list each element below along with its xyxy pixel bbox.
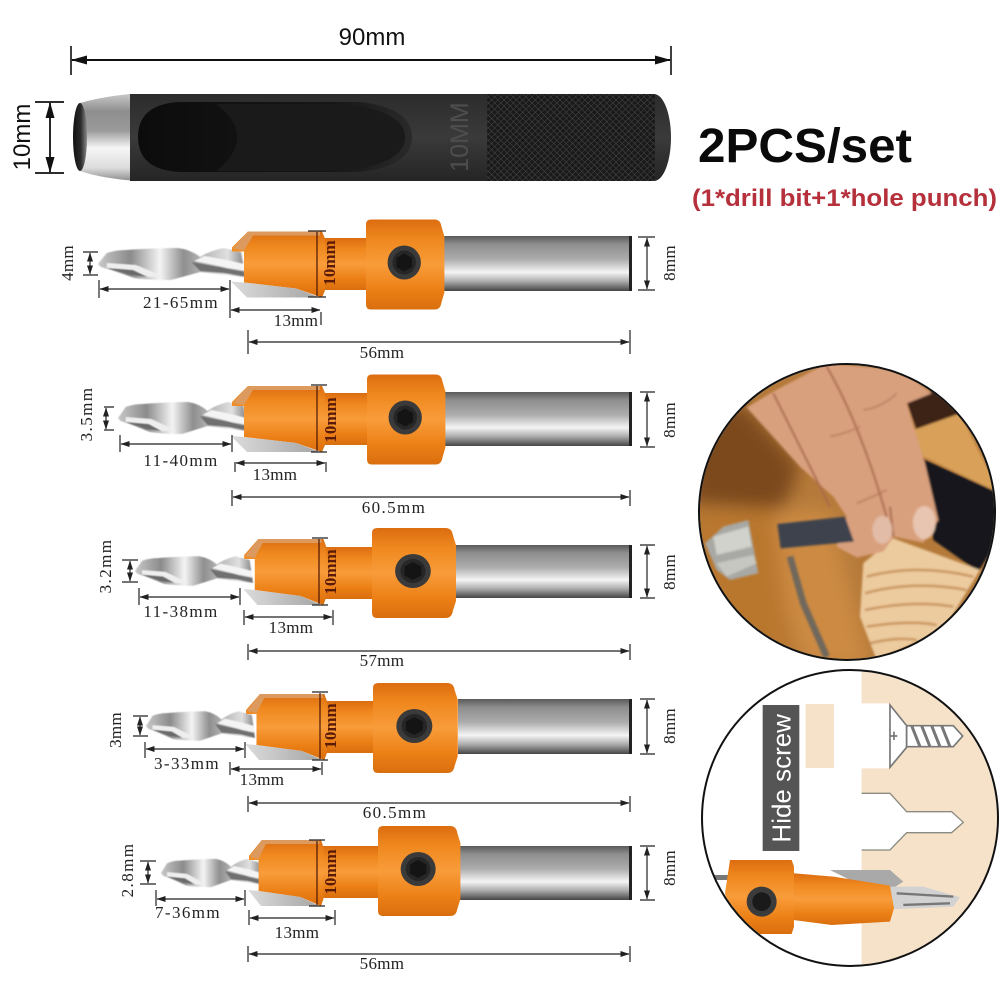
subtitle: contents: (1*drill bit+1*hole punch) xyxy=(692,185,997,212)
hole punch dimension: 10mm: 10mm xyxy=(9,104,36,170)
dimensions for bit 4: 60.5mm xyxy=(363,803,427,822)
dimensions for bit 3: 13mm xyxy=(269,618,313,637)
hole punch dimension: 90mm xyxy=(71,24,671,75)
dimensions for bit 4: 13mm xyxy=(240,770,284,789)
dimensions for bit 4 xyxy=(106,692,679,822)
dimensions for bit 1 xyxy=(58,231,679,362)
dimensions for bit 4: 10mm xyxy=(321,703,340,749)
dimensions for bit 5: 8mm xyxy=(660,850,679,886)
dimensions for bit 2: 60.5mm xyxy=(362,498,426,517)
hole punch tool xyxy=(73,94,671,181)
dimensions for bit 3: 11-38mm xyxy=(143,602,219,621)
dimensions for bit 1: 56mm xyxy=(360,343,404,362)
dimensions for bit 4: 8mm xyxy=(660,708,679,744)
dimensions for bit 2: 10mm xyxy=(321,397,340,443)
dimensions for bit 1: 13mm xyxy=(274,311,318,330)
drill bit 2 xyxy=(77,374,679,517)
dimensions for bit 4: 3mm xyxy=(106,712,125,748)
drill bit 1 xyxy=(58,220,679,362)
dimensions for bit 3: 57mm xyxy=(360,651,404,670)
dimensions for bit 2: 3.5mm xyxy=(77,387,96,441)
dimensions for bit 1: 21-65mm xyxy=(143,293,219,312)
dimensions for bit 2: 8mm xyxy=(660,402,679,438)
hole punch tool: 10MM xyxy=(446,102,474,172)
dimensions for bit 1: 4mm xyxy=(58,245,77,281)
drill bit 5 xyxy=(118,826,679,973)
drill bit 4 xyxy=(106,683,679,822)
countersink bit in use xyxy=(710,860,960,934)
dimensions for bit 3: 8mm xyxy=(660,554,679,590)
hole punch dimension: 10mm xyxy=(9,102,64,173)
dimensions for bit 5: 56mm xyxy=(360,954,404,973)
dimensions for bit 3: 10mm xyxy=(321,549,340,595)
dimensions for bit 1: 8mm xyxy=(660,245,679,281)
wood board with cut-outs xyxy=(862,667,1000,970)
circle: hand using hole punch on wood xyxy=(690,363,1000,667)
dimensions for bit 4: 3-33mm xyxy=(154,754,220,773)
hole punch dimension: 90mm: 90mm xyxy=(339,24,405,51)
hide screw label: Hide screw xyxy=(766,714,796,843)
circle: hide screw diagram xyxy=(702,667,1000,970)
dimensions for bit 5: 2.8mm xyxy=(118,843,137,897)
dimensions for bit 5: 13mm xyxy=(275,923,319,942)
dimensions for bit 2: 13mm xyxy=(253,465,297,484)
screw xyxy=(890,705,963,767)
title: 2PCS/set: 2PCS/set xyxy=(698,120,912,173)
dimensions for bit 3: 3.2mm xyxy=(96,539,115,593)
dimensions for bit 3 xyxy=(96,538,679,670)
dimensions for bit 1: 10mm xyxy=(320,240,339,286)
wood plug xyxy=(806,704,834,768)
drill bit 3 xyxy=(96,528,679,670)
dimensions for bit 2: 11-40mm xyxy=(143,451,219,470)
dimensions for bit 5 xyxy=(118,840,679,973)
dimensions for bit 2 xyxy=(77,385,679,517)
dimensions for bit 5: 7-36mm xyxy=(155,903,221,922)
dimensions for bit 5: 10mm xyxy=(321,849,340,895)
